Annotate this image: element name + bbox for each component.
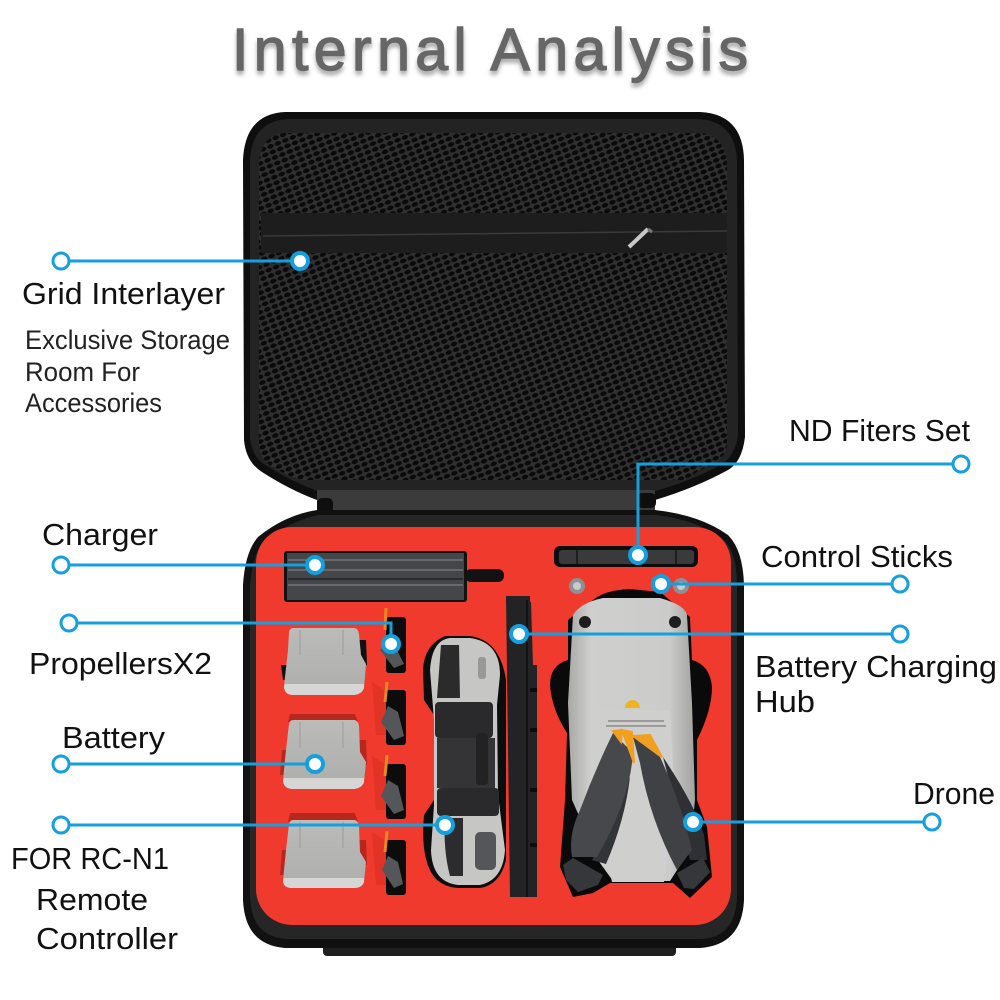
- callout: battery: [53, 756, 323, 772]
- propellers: [372, 608, 406, 895]
- text block: storage description: [25, 325, 230, 418]
- hinge strip: [317, 490, 655, 514]
- callout: drone: [685, 814, 940, 830]
- callout: ND filters: [630, 456, 969, 563]
- battery charging hub: [506, 596, 537, 897]
- drone: [550, 589, 712, 898]
- callout: grid interlayer: [53, 253, 308, 269]
- callout: control sticks: [653, 576, 908, 592]
- label: propellers: PropellersX2: [29, 646, 212, 681]
- ND filters set: [554, 546, 698, 567]
- label: battery charging hub: [755, 649, 997, 719]
- text block: storage description: Room For: [25, 357, 140, 387]
- folded propellers: [592, 777, 630, 864]
- label: battery charging hub: Hub: [755, 684, 815, 719]
- text block: storage description: Accessories: [25, 388, 162, 418]
- label: ND filters: ND Fiters Set: [789, 413, 970, 448]
- panel: case lid with mesh pocket: [243, 112, 745, 500]
- label: battery charging hub: Battery Charging: [755, 649, 997, 684]
- label: remote controller: [11, 841, 178, 956]
- label: battery: Battery: [62, 720, 166, 755]
- batteries: [280, 628, 367, 888]
- drone body: [568, 598, 695, 881]
- pocket zipper band: [261, 213, 727, 253]
- text block: storage description: Exclusive Storage: [25, 325, 230, 355]
- label: grid interlayer: Grid Interlayer: [22, 276, 225, 311]
- drone pocket: [550, 589, 712, 898]
- mesh surface: [259, 133, 727, 480]
- label: charger: Charger: [42, 517, 158, 552]
- callout: battery charging hub: [511, 626, 908, 642]
- control sticks: [569, 578, 689, 594]
- label: remote controller: Controller: [36, 921, 178, 956]
- callout: propellers: [61, 615, 399, 652]
- title: Internal Analysis: [232, 17, 748, 83]
- label: drone: Drone: [913, 776, 995, 811]
- label: remote controller: Remote: [36, 882, 148, 917]
- panel: case base with red foam: [243, 490, 744, 956]
- remote controller: [423, 636, 506, 888]
- charger: [284, 551, 504, 602]
- label: control sticks: Control Sticks: [761, 539, 953, 574]
- bottom strap: [323, 935, 676, 956]
- callout: charger: [53, 557, 323, 573]
- label: remote controller: FOR RC-N1: [11, 841, 169, 876]
- callout: remote controller: [53, 817, 453, 833]
